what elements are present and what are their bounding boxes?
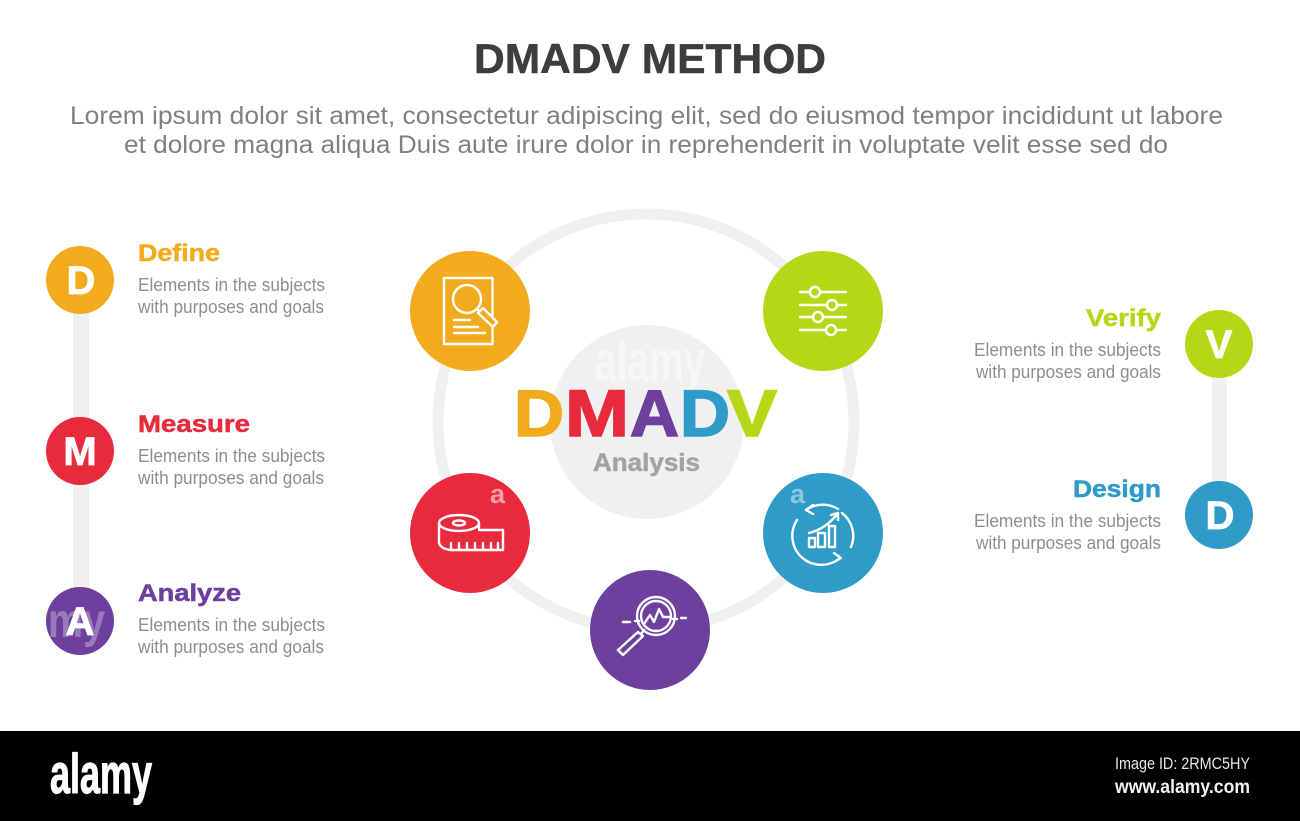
step: analyze [46,580,325,657]
step: analyze: A [66,600,94,644]
watermark: letter a: a [790,479,806,509]
step: define [46,240,325,317]
step: measure: Elements in the subjects [138,446,325,466]
centre heading DMADV [514,376,777,450]
icon: verify sliders [763,251,883,371]
image id: Image ID: 2RMC5HY [1115,754,1250,773]
step: measure: Measure [138,411,250,438]
icon: analyze magnifier [590,570,710,690]
watermark: centre: alamy [595,329,705,394]
icon: define document search [410,251,530,371]
step: verify: Verify [1086,305,1162,332]
panel: central cycle diagram [410,214,883,690]
connector bar [73,300,89,610]
outer ring [438,214,854,630]
panel: right steps [974,305,1253,553]
step: analyze: with purposes and goals [137,637,324,657]
step: design: with purposes and goals [975,533,1161,553]
step: design: Elements in the subjects [974,511,1161,531]
intro paragraph [70,102,1223,159]
centre subheading: Analysis [593,449,700,477]
step: analyze: Analyze [138,580,241,607]
step: design [974,476,1253,553]
centre heading DMADV: A [630,376,679,450]
centre heading DMADV: D [514,376,564,450]
step: analyze: Elements in the subjects [138,615,325,635]
icon: measure tape [410,473,530,593]
intro paragraph: et dolore magna aliqua Duis aute irure dolor in reprehenderit in voluptate velit esse sed do [124,131,1168,159]
panel: left steps [46,240,325,657]
intro paragraph: Lorem ipsum dolor sit amet, consectetur adipiscing elit, sed do eiusmod tempor incididunt ut labore [70,102,1223,130]
watermark: left: my [48,595,105,648]
step: verify: Elements in the subjects [974,340,1161,360]
title: DMADV METHOD [474,35,826,82]
footer logo: alamy [50,742,152,805]
icon: design growth cycle [763,473,883,593]
step: design: D [1206,494,1234,538]
step: design: Design [1073,476,1161,503]
step: verify: with purposes and goals [975,362,1161,382]
centre heading DMADV: M [565,376,629,450]
connector bar [1212,360,1227,500]
step: measure: with purposes and goals [137,468,324,488]
step: define: Define [138,240,220,267]
centre disc [550,325,744,519]
footer bar [0,731,1300,821]
step: verify: V [1206,323,1233,367]
step: define: with purposes and goals [137,297,324,317]
step: verify [974,305,1253,382]
centre heading DMADV: V [727,376,777,450]
step: define: D [67,259,95,303]
step: measure [46,411,325,488]
website: www.alamy.com [1114,777,1250,798]
step: define: Elements in the subjects [138,275,325,295]
centre heading DMADV: D [680,376,730,450]
watermark: letter a: a [490,479,506,509]
step: measure: M [63,430,97,474]
